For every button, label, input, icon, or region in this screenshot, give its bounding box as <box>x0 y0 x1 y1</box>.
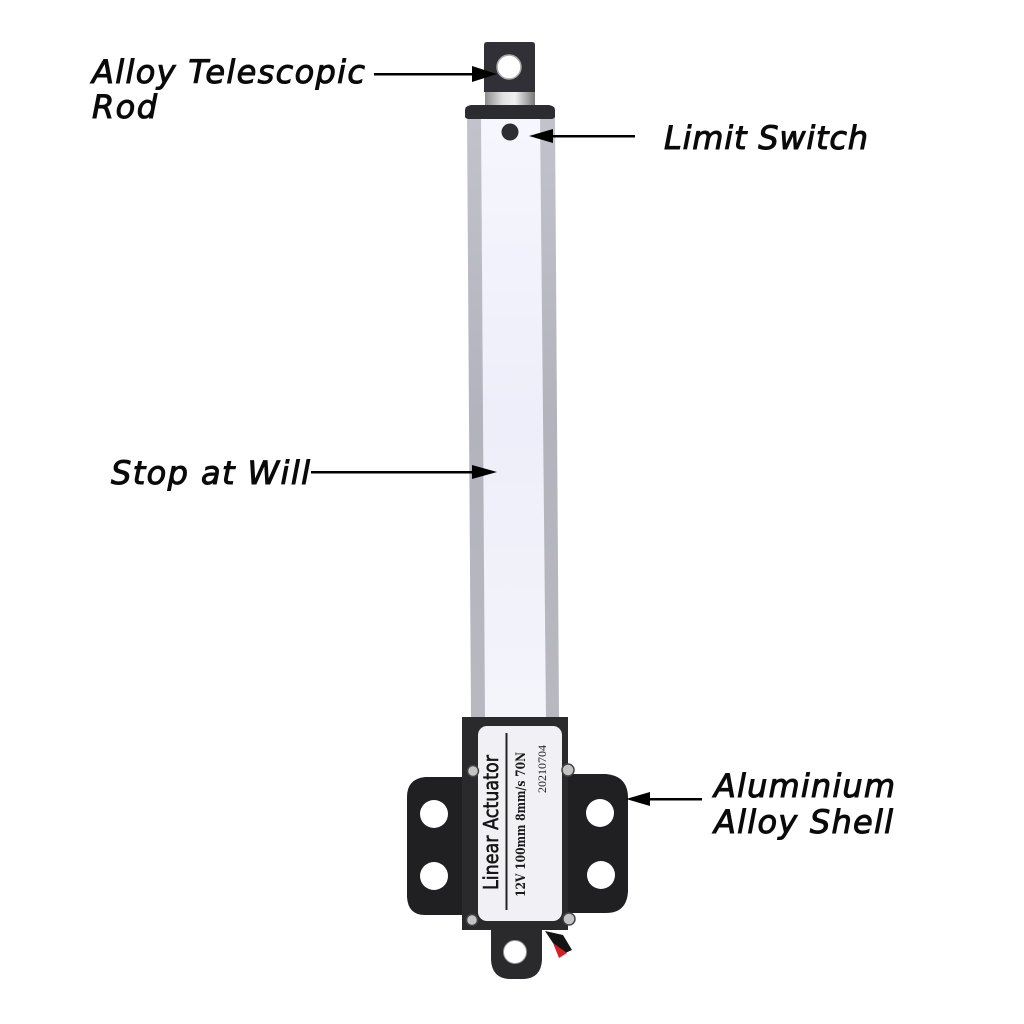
arrow: to limit switch <box>529 129 635 143</box>
screws <box>466 764 575 926</box>
arrow: to telescopic rod <box>374 66 497 82</box>
label divider <box>506 733 508 910</box>
arrow: to housing <box>626 792 702 806</box>
label title: Linear Actuator <box>479 754 503 890</box>
label: Alloy Telescopic Rod: Alloy Telescopic <box>90 53 365 91</box>
collar <box>465 105 555 119</box>
label: Stop at Will: Stop at Will <box>111 454 310 492</box>
arrow: to tube <box>311 465 497 479</box>
label: Aluminium Alloy Shell: Alloy Shell <box>712 803 893 841</box>
wires <box>545 931 572 958</box>
label specification: 12V 100mm 8mm/s 70N <box>514 752 529 897</box>
white label <box>478 726 562 921</box>
label: Aluminium Alloy Shell <box>712 767 895 841</box>
label: Limit Switch: Limit Switch <box>664 119 868 157</box>
mounting wing left <box>407 777 463 915</box>
label date code: 20210704 <box>535 745 549 793</box>
mounting wing right <box>566 774 628 913</box>
motor housing <box>462 717 575 930</box>
actuator product photo <box>407 42 628 979</box>
telescopic rod <box>484 42 535 107</box>
bottom mounting tab <box>491 928 542 979</box>
tube <box>465 105 559 718</box>
label: Alloy Telescopic Rod <box>90 53 365 126</box>
label: Alloy Telescopic Rod: Rod <box>92 88 158 126</box>
limit switch screw <box>502 124 518 140</box>
label: Aluminium Alloy Shell: Aluminium <box>712 767 895 805</box>
